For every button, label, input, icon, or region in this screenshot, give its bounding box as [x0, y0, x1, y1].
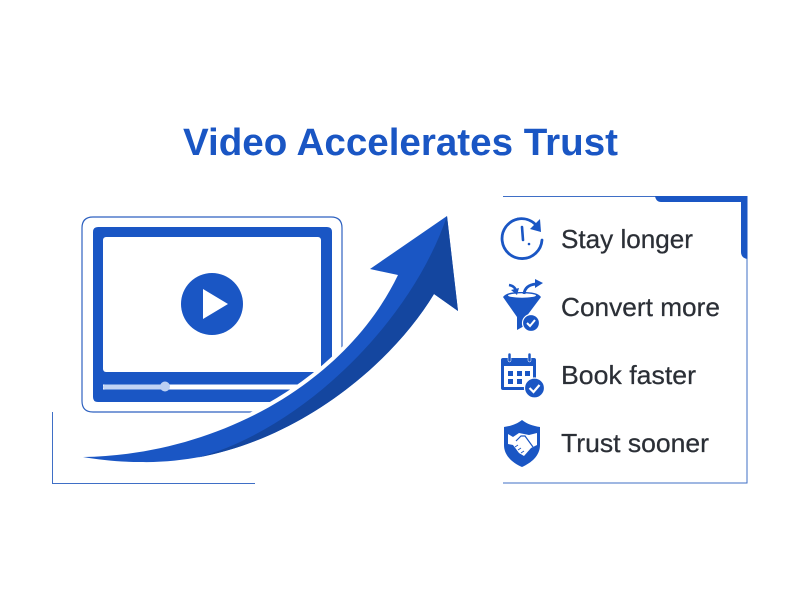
monitor body	[93, 227, 332, 402]
arrow shaded edge	[197, 216, 458, 458]
label: Convert more	[561, 292, 720, 322]
arrow halo	[83, 216, 458, 462]
arrow body	[83, 216, 458, 462]
icon: funnel	[503, 279, 543, 332]
icon: calendar	[501, 353, 544, 398]
label: Stay longer	[561, 224, 693, 254]
benefits panel frame	[503, 196, 748, 483]
benefit: book faster	[501, 353, 696, 398]
title: Video Accelerates Trust	[183, 122, 618, 164]
benefit: trust sooner	[504, 420, 709, 467]
label: Trust sooner	[561, 428, 709, 458]
label: Book faster	[561, 360, 696, 390]
play button	[181, 273, 243, 335]
benefit: stay longer	[502, 219, 693, 259]
benefit: convert more	[503, 279, 720, 332]
video player illustration	[82, 217, 342, 412]
icon: clock	[502, 219, 542, 259]
left bracket frame	[52, 412, 255, 484]
growth arrow	[83, 216, 458, 462]
monitor screen	[103, 237, 321, 372]
icon: shield with handshake	[504, 420, 540, 467]
monitor outer outline	[82, 217, 342, 412]
panel corner accent	[655, 196, 748, 259]
progress bar	[103, 382, 303, 392]
